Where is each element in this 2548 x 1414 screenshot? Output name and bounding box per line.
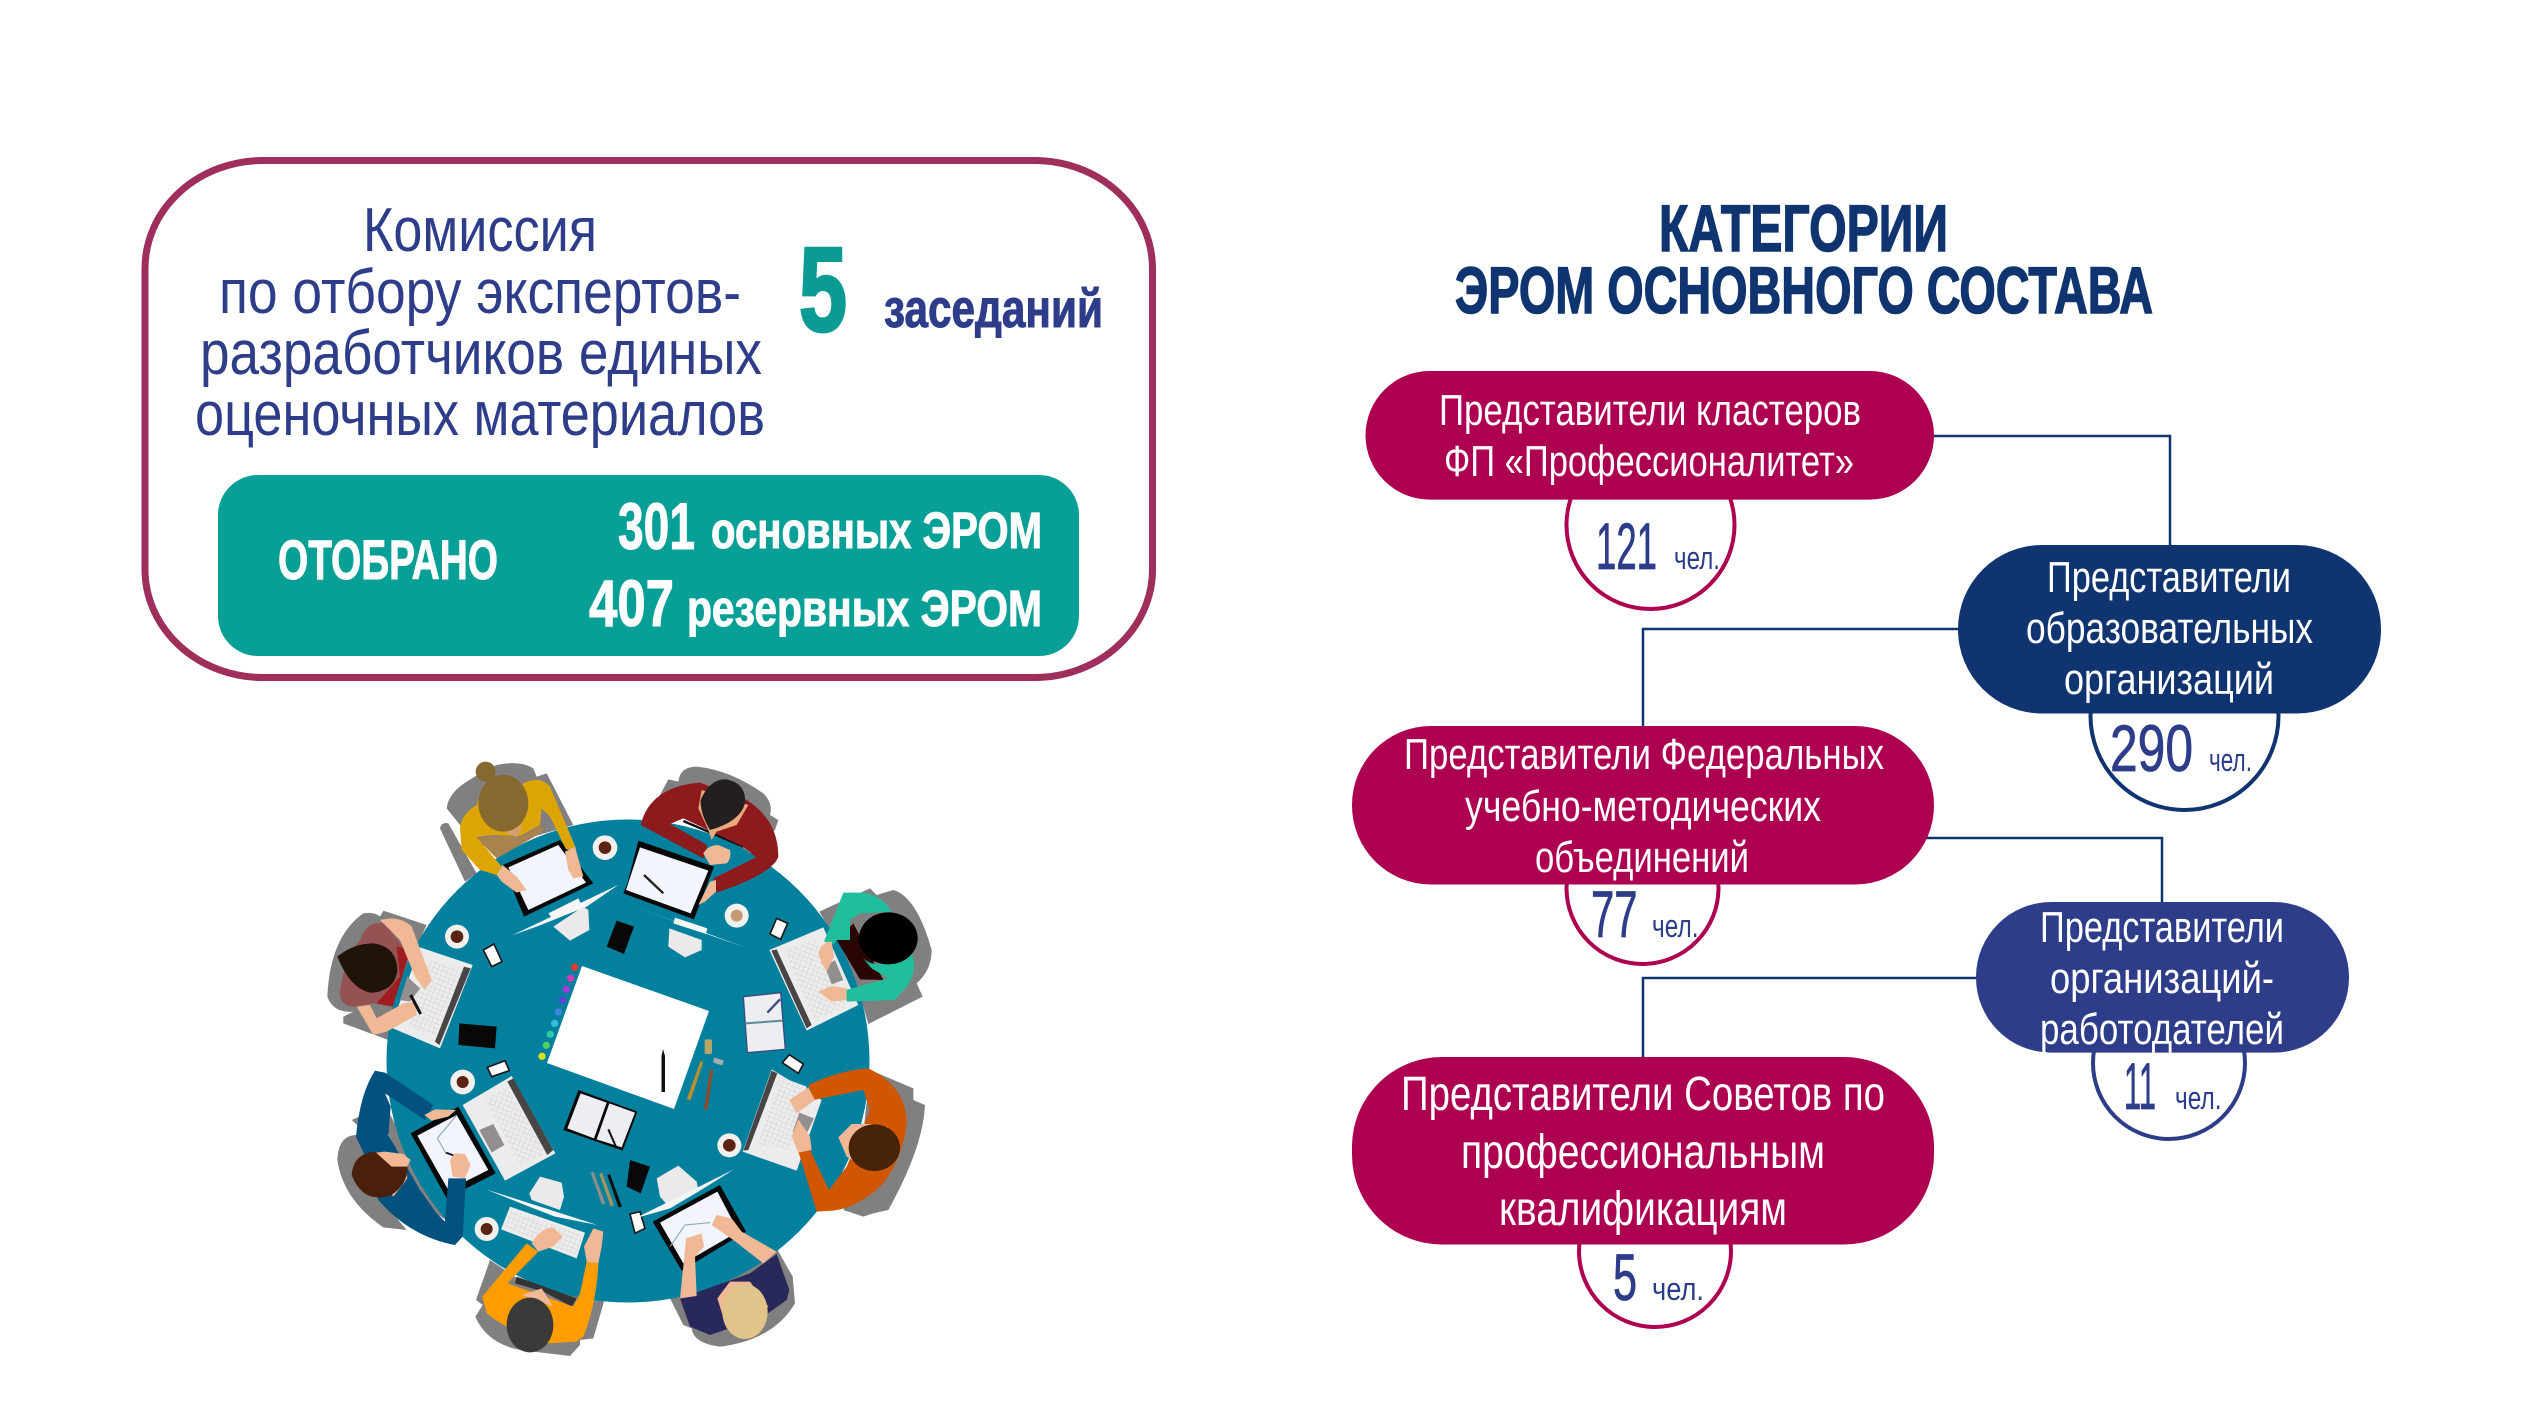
category pill: clusters: ФП «Профессионалитет» [1444,437,1854,486]
category pill: educational organisations: образовательных [2026,604,2313,653]
category pill: clusters [1366,371,1934,500]
main experts count: основных ЭРОМ [711,502,1042,559]
category pill: educational organisations [1958,545,2381,714]
count badge: 11: 11 [2124,1049,2156,1123]
category pill: federal associations: учебно-методических [1465,782,1821,831]
category pill: qualification councils: квалификациям [1499,1183,1787,1236]
reserve experts count: резервных ЭРОМ [687,580,1042,637]
category pill: educational organisations: организаций [2064,655,2274,704]
category pill: clusters: Представители кластеров [1439,386,1861,435]
commission title: разработчиков единых [200,319,762,388]
commission title: по отбору экспертов- [219,258,741,327]
count badge: 121: 121 [1596,509,1657,583]
person: top left, yellow sweater [460,762,618,941]
table items: lower left [450,1061,637,1241]
count badge: 290: чел. [2209,742,2252,778]
category pill: employers: работодателей [2040,1005,2284,1054]
person: left bottom, blue sweater [352,1071,555,1245]
connector: federal associations to employers [1920,838,2162,906]
table items: upper left [445,835,634,1060]
person: right top, teal sweater [769,893,918,1031]
main experts count [618,489,1042,563]
meetings label: заседаний [884,279,1103,339]
table items: lower right [627,1055,803,1233]
center pencil [662,1049,665,1092]
category pill: qualification councils: Представители Советов по [1401,1068,1885,1121]
round table [386,820,870,1302]
category pill: federal associations [1352,726,1934,884]
panel: commission [145,160,1152,678]
commission title [195,196,765,449]
selected summary box [218,475,1079,656]
person: bottom left, orange sweater [482,1177,603,1352]
chairs [327,763,932,1356]
count badge: 5: чел. [1652,1271,1704,1307]
count badge: 290: 290 [2110,711,2193,785]
count badge: 11: чел. [2175,1080,2222,1116]
commission title: Комиссия [363,196,597,265]
category pill: qualification councils: профессиональным [1461,1126,1825,1179]
heading: categories [1455,191,2153,327]
category pill: educational organisations: Представители [2047,553,2291,602]
connector: clusters to educational organisations [1925,436,2170,550]
category pill: employers: Представители [2040,903,2284,952]
category pill: employers [1976,902,2349,1054]
count badge: 11 [2093,987,2245,1139]
connector: employers to qualification councils [1643,978,1985,1062]
meetings count: 5 [799,223,847,357]
reserve experts count: 407 [589,566,674,640]
count badge: 77 [1566,812,1718,964]
commission title: оценочных материалов [195,380,765,449]
count badge: 121 [1566,441,1734,609]
count badge: 5: 5 [1613,1240,1637,1314]
heading: categories: КАТЕГОРИИ [1659,191,1948,265]
count badge: 290 [2090,622,2278,810]
person: left top, maroon shirt [337,918,473,1048]
heading: categories: ЭРОМ ОСНОВНОГО СОСТАВА [1455,253,2153,327]
count badge: 77: 77 [1591,877,1638,951]
count badge: 5 [1579,1175,1731,1327]
panel frame [145,160,1152,678]
main experts count: 301 [618,489,695,563]
category pill: federal associations: Представители Федеральных [1404,730,1884,779]
count badge: 121: чел. [1674,540,1720,576]
person: top right, dark red sweater [623,779,778,957]
category pill: qualification councils [1352,1057,1934,1244]
connector: educational organisations to federal associations [1643,629,1965,732]
person: bottom right, navy shirt [635,1166,789,1339]
table items: upper right [705,904,788,1054]
reserve experts count [589,566,1042,640]
category pill: employers: организаций- [2050,954,2274,1003]
illustration: people at round table [327,762,932,1356]
center paper [547,966,709,1109]
category pill: federal associations: объединений [1535,833,1749,882]
person: right bottom, orange-red sweater [743,1068,907,1212]
count badge: 77: чел. [1652,908,1698,944]
selected label: ОТОБРАНО [278,528,498,591]
